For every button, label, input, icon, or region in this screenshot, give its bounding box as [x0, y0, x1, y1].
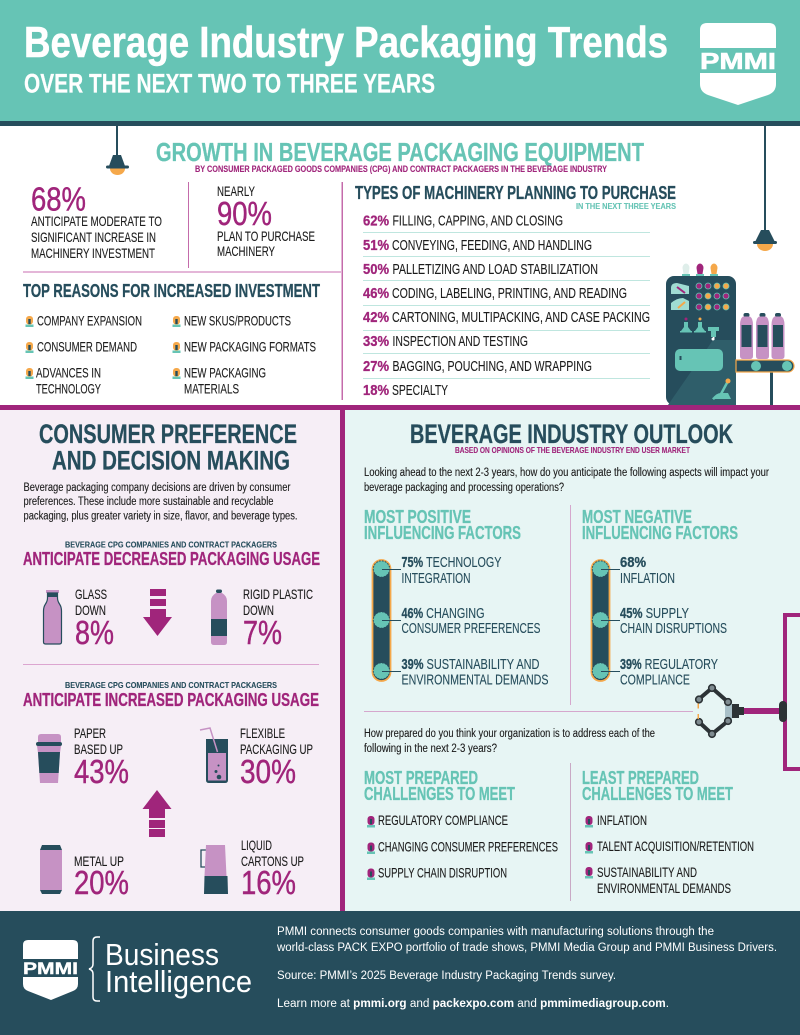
heading: most positive: INFLUENCING FACTORS [364, 523, 521, 543]
footer text: Learn more at pmmi.org and packexpo.com and pmmimediagroup.com. [277, 998, 669, 1010]
heading: consumer preference: AND DECISION MAKING [52, 446, 290, 476]
intro text: preferences. These include more sustainable and recyclable [24, 496, 274, 508]
list: negative factors: 68% [620, 554, 646, 571]
stat: glass: 8% [75, 614, 114, 651]
heading: most positive: MOST POSITIVE [364, 507, 471, 527]
list: machinery types: SPECIALTY [392, 382, 448, 399]
footer text: world-class PACK EXPO portfolio of trade shows, PMMI Media Group and PMMI Business Drivers. [276, 942, 777, 954]
list: least prepared: ENVIRONMENTAL DEMANDS [597, 880, 731, 896]
list: negative factors: INFLATION [620, 570, 675, 587]
heading: least prepared [582, 768, 733, 804]
list: most prepared: CHANGING CONSUMER PREFERENCES [378, 838, 558, 854]
list: negative factors: 39% REGULATORY [620, 656, 718, 673]
illustration: packaging machine [666, 264, 794, 405]
lever [712, 378, 731, 399]
footer logo [23, 940, 78, 1000]
list: top reasons: ADVANCES IN [36, 364, 101, 380]
list: machinery types [363, 212, 650, 399]
stat: nearly 90 percent: 90% [217, 195, 272, 232]
stat: paper [74, 725, 129, 790]
list: machinery types: PALLETIZING AND LOAD STABILIZATION [392, 261, 598, 278]
list: machinery types: 42% [363, 309, 389, 326]
PMMI logo [700, 23, 776, 105]
icon: flexible packaging glass [200, 728, 228, 783]
list: negative factors: COMPLIANCE [620, 672, 690, 688]
heading: most negative [582, 507, 738, 543]
stat: flexible: FLEXIBLE [240, 725, 285, 741]
heading: most negative: INFLUENCING FACTORS [582, 523, 738, 543]
icon: metal can [40, 845, 62, 894]
heading: top reasons: TOP REASONS FOR INCREASED INVESTMENT [23, 280, 320, 301]
stat: metal [74, 853, 129, 901]
footer text [276, 926, 777, 1010]
list: least prepared: SUSTAINABILITY AND [597, 864, 697, 880]
outlook question [364, 467, 769, 494]
stat: flexible: PACKAGING UP [240, 741, 313, 757]
stat: 68 percent [31, 180, 162, 261]
list: most prepared: SUPPLY CHAIN DISRUPTION [378, 864, 507, 880]
heading: most prepared [364, 768, 515, 804]
heading: decreased usage: ANTICIPATE DECREASED PACKAGING USAGE [23, 549, 320, 569]
stat: glass: DOWN [75, 602, 106, 618]
preparedness question [364, 728, 655, 755]
outlook question: beverage packaging and processing operations? [364, 482, 564, 494]
stat: 68 percent: ANTICIPATE MODERATE TO [31, 213, 162, 229]
list: most prepared: REGULATORY COMPLIANCE [378, 812, 508, 828]
stat: 68 percent: MACHINERY INVESTMENT [31, 245, 155, 261]
heading: most negative: MOST NEGATIVE [582, 507, 692, 527]
list: positive factors: ENVIRONMENTAL DEMANDS [402, 672, 548, 688]
header banner [0, 0, 800, 126]
icon: hanging lamp right [753, 126, 777, 251]
arrow: up [142, 790, 172, 837]
stat: liquid cartons: CARTONS UP [241, 853, 304, 869]
intro text [24, 482, 298, 522]
stat: liquid cartons: LIQUID [241, 837, 272, 853]
title: Beverage Industry Packaging Trends [24, 18, 668, 67]
preparedness question: following in the next 2-3 years? [364, 743, 497, 755]
stat: paper: BASED UP [74, 741, 123, 757]
indicator bulbs [682, 264, 718, 276]
list: top reasons: MATERIALS [184, 380, 239, 396]
icon: conveyor belt positive [372, 560, 401, 681]
stat: nearly 90 percent: MACHINERY [217, 243, 275, 259]
stat: liquid cartons [241, 837, 304, 901]
stat: rigid plastic [243, 586, 313, 651]
note: next three years: IN THE NEXT THREE YEARS [576, 202, 677, 211]
heading: most positive [364, 507, 521, 543]
heading: consumer preference: CONSUMER PREFERENCE [39, 419, 297, 449]
footer [0, 911, 800, 1035]
footer text: PMMI connects consumer goods companies with manufacturing solutions through the [277, 926, 714, 938]
list: negative factors [620, 554, 727, 688]
stat: rigid plastic: RIGID PLASTIC [243, 586, 313, 602]
arrow: down [143, 589, 172, 636]
preparedness question: How prepared do you think your organization is to address each of the [364, 728, 655, 740]
business intelligence wordmark: Business [105, 937, 219, 972]
list: positive factors: 46% CHANGING [402, 605, 484, 622]
panel: industry outlook [345, 410, 800, 911]
subtitle: OVER THE NEXT TWO TO THREE YEARS [24, 68, 435, 98]
list: machinery types: INSPECTION AND TESTING [392, 333, 528, 350]
stat: metal: METAL UP [74, 853, 124, 869]
list: machinery types: CARTONING, MULTIPACKING, AND CASE PACKING [392, 309, 650, 326]
footer logo: PMMI [23, 959, 78, 978]
stat: nearly 90 percent: PLAN TO PURCHASE [217, 228, 315, 244]
list: least prepared [585, 812, 754, 896]
stat: paper: PAPER [74, 725, 106, 741]
PMMI logo: PMMI [700, 48, 776, 74]
gauges [671, 283, 689, 310]
list: top reasons [26, 312, 316, 396]
heading: decreased usage [23, 540, 320, 569]
list: positive factors: CONSUMER PREFERENCES [402, 620, 540, 637]
stat: flexible [240, 725, 313, 790]
stat: glass: GLASS [75, 586, 107, 602]
icon: glass bottle [44, 590, 62, 644]
list: positive factors: 39% SUSTAINABILITY AND [402, 656, 540, 673]
list: machinery types: 27% [363, 358, 389, 375]
stat: nearly 90 percent [217, 183, 315, 259]
list: machinery types: CODING, LABELING, PRINTING, AND READING [392, 285, 627, 302]
heading: increased usage: BEVERAGE CPG COMPANIES AND CONTRACT PACKAGERS [65, 680, 277, 690]
list: top reasons: COMPANY EXPANSION [37, 312, 142, 328]
list: machinery types: FILLING, CAPPING, AND CLOSING [392, 212, 563, 230]
list: machinery types: 50% [363, 261, 389, 278]
icon: paper cup [36, 734, 62, 783]
list: top reasons: NEW PACKAGING [184, 364, 266, 380]
heading: increased usage: ANTICIPATE INCREASED PACKAGING USAGE [23, 690, 319, 710]
list: positive factors: INTEGRATION [402, 570, 470, 587]
list: machinery types: 46% [363, 285, 389, 302]
heading: increased usage [23, 680, 319, 710]
list: top reasons: NEW PACKAGING FORMATS [184, 338, 316, 354]
panel: consumer preference [0, 410, 340, 911]
control panel [675, 349, 723, 371]
stat: flexible: 30% [240, 753, 296, 790]
footer text: Source: PMMI’s 2025 Beverage Industry Packaging Trends survey. [277, 970, 616, 982]
heading: least prepared: LEAST PREPARED [582, 768, 699, 788]
icon: conveyor belt negative [592, 560, 620, 681]
list: most prepared [367, 812, 558, 880]
list: top reasons: TECHNOLOGY [36, 380, 101, 396]
list: machinery types: 62% [363, 212, 389, 230]
list: machinery types: BAGGING, POUCHING, AND WRAPPING [392, 358, 592, 375]
section subheading: BY CONSUMER PACKAGED GOODS COMPANIES (CPG) AND CONTRACT PACKAGERS IN THE BEVERAGE INDUSTRY [195, 164, 608, 175]
list: positive factors [402, 554, 548, 688]
stat: rigid plastic: DOWN [243, 602, 274, 618]
list: top reasons: NEW SKUS/PRODUCTS [184, 312, 291, 328]
list: negative factors: 45% SUPPLY [620, 605, 689, 622]
stat: paper: 43% [74, 753, 129, 790]
icon: plastic bottle [211, 590, 227, 645]
list: least prepared: INFLATION [597, 812, 647, 828]
stat: rigid plastic: 7% [243, 614, 282, 651]
stat: 68 percent: 68% [31, 180, 86, 218]
outlook subheading: BASED ON OPINIONS OF THE BEVERAGE INDUSTRY END USER MARKET [455, 445, 691, 455]
heading: least prepared: CHALLENGES TO MEET [582, 784, 733, 804]
control lights [696, 283, 729, 310]
heading: decreased usage: BEVERAGE CPG COMPANIES AND CONTRACT PACKAGERS [65, 540, 277, 550]
brace [89, 937, 100, 1001]
business intelligence wordmark [105, 937, 252, 999]
heading: most prepared: MOST PREPARED [364, 768, 478, 788]
business intelligence wordmark: Intelligence [105, 964, 252, 999]
panel divider [340, 410, 345, 911]
stat: glass [75, 586, 114, 651]
section heading: GROWTH IN BEVERAGE PACKAGING EQUIPMENT [156, 137, 644, 167]
list: machinery types: CONVEYING, FEEDING, AND HANDLING [392, 237, 592, 254]
section divider bar [0, 405, 800, 410]
stat: liquid cartons: 16% [241, 864, 296, 901]
icon: hanging lamp left [106, 126, 129, 175]
icon: liquid carton [201, 845, 228, 894]
stat: nearly 90 percent: NEARLY [217, 183, 255, 199]
switches [680, 318, 719, 340]
stat: 68 percent: SIGNIFICANT INCREASE IN [31, 229, 156, 245]
list: positive factors: 75% TECHNOLOGY [402, 554, 502, 571]
list: top reasons: CONSUMER DEMAND [37, 338, 137, 354]
list: machinery types: 33% [363, 333, 389, 350]
list: machinery types: 18% [363, 382, 389, 399]
intro text: packaging, plus greater variety in size, flavor, and beverage types. [24, 510, 298, 522]
heading: types of machinery: TYPES OF MACHINERY PLANNING TO PURCHASE [355, 182, 676, 203]
intro text: Beverage packaging company decisions are driven by consumer [24, 482, 291, 494]
list: negative factors: CHAIN DISRUPTIONS [620, 620, 727, 637]
stat: metal: 20% [74, 864, 129, 901]
panel: growth in packaging equipment [0, 126, 800, 405]
heading: consumer preference [39, 419, 297, 476]
list: machinery types: 51% [363, 237, 389, 254]
heading: most prepared: CHALLENGES TO MEET [364, 784, 515, 804]
conveyor and bottles [736, 313, 794, 405]
illustration: robotic arm [696, 615, 800, 769]
